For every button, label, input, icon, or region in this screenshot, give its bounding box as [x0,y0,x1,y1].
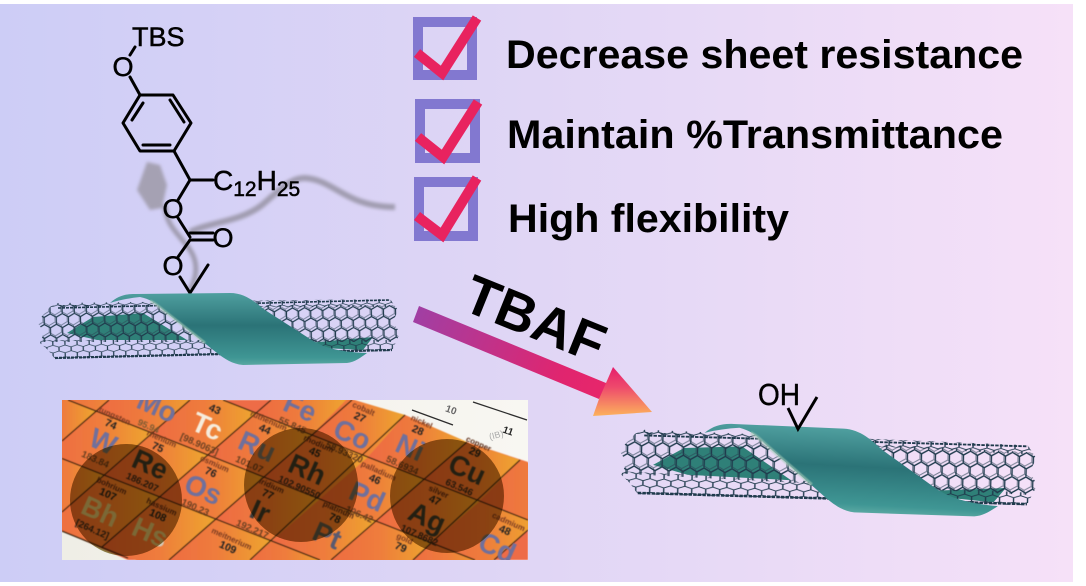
element symbols and numbers: silver [427,484,450,500]
element symbols and numbers: [98.9063] [178,432,220,458]
element symbols and numbers: 78 [327,511,343,527]
element symbols and numbers: 106.42 [344,504,375,526]
group headers: (IB) [488,428,505,442]
element symbols and numbers: 190.23 [180,497,211,519]
checklist [417,18,1023,241]
element symbols and numbers: Tc [187,406,227,447]
element symbols and numbers: 186.207 [124,471,160,495]
element symbols and numbers: 107.8682 [399,523,439,549]
element symbols and numbers: palladium [360,459,397,483]
element symbols and numbers: [264.12] [74,518,110,542]
atom labels: O [162,194,184,224]
element symbols and numbers: rhenium [145,428,178,449]
element symbols and numbers: 79 [393,540,409,556]
group headers: 11 [501,425,515,439]
element symbols and numbers: Ir [245,494,275,530]
element symbols and numbers: Fe [279,387,321,428]
element symbols and numbers: 95.94 [136,417,161,435]
element symbols and numbers: 108 [147,507,168,525]
element symbols and numbers: Re [128,443,173,486]
element symbols and numbers: Co [329,413,376,456]
element symbols and numbers: iridium [258,476,286,495]
chemical structure: TBS-protected aryl carbonate [112,22,300,293]
element symbols and numbers: 192.217 [234,518,270,542]
element symbols and numbers: 55.845 [277,415,308,437]
deposited circle: right [390,439,504,553]
element symbols and numbers: Pd [345,475,390,518]
element symbols and numbers: 29 [467,445,483,461]
element symbols and numbers: Pt [308,516,346,555]
text: decrease sheet resistance: Decrease sheet resistance [506,33,1023,77]
element symbols and numbers: 43 [207,402,223,418]
element symbols and numbers: 77 [260,487,276,503]
nanotube wrapped with polymer ribbon (left) [30,293,410,365]
atom labels: 25 [277,178,300,201]
element symbols and numbers: Hs [128,511,173,554]
element symbols and numbers: Ni [391,428,429,467]
element symbols and numbers: Cd [474,526,521,569]
element symbols and numbers: platinum [322,499,356,521]
element symbols and numbers: rhodium [302,433,335,455]
atom labels: 12 [233,178,257,201]
atom labels: O [162,251,184,281]
atom labels: H [257,165,277,196]
element symbols and numbers: 58.6934 [384,454,421,478]
reaction arrow [413,306,652,416]
coloured cells [62,400,528,560]
element symbols and numbers: bohrium [95,475,128,497]
nanotube with ribbon after deprotection (right) [608,416,1051,523]
hydroxyl label and bond [758,377,817,429]
element symbols and numbers: Os [180,468,227,511]
element symbols and numbers: gold [395,531,414,547]
element symbols and numbers: 48 [497,523,513,539]
element symbols and numbers: Ru [234,425,281,468]
element symbols and numbers: Bh [77,490,124,533]
atom labels: O [112,52,134,82]
element symbols and numbers: 109 [217,539,238,557]
atom labels: TBS [132,22,185,52]
checkbox: high flexibility [417,178,477,236]
checkbox: maintain transmittance [418,102,478,158]
element symbols and numbers: Rh [284,448,331,491]
element symbols and numbers [74,400,525,560]
element symbols and numbers: cobalt [351,400,376,418]
element symbols and numbers: 28 [410,423,426,439]
element symbols and numbers: 183.84 [80,449,111,471]
text: high flexibility: High flexibility [508,197,789,241]
element symbols and numbers: 75 [150,440,166,456]
element symbols and numbers: Ag [404,496,451,539]
element symbols and numbers: Mo [132,384,182,429]
element symbols and numbers: Cu [444,448,491,491]
element symbols and numbers: 47 [427,493,443,509]
deposited circle: middle [244,428,358,542]
element symbols and numbers: osmium [199,454,230,474]
hydroxyl label and bond: OH [758,377,800,412]
atom labels [112,22,300,281]
shadow of molecule on the sheet [137,162,395,290]
element symbols and numbers: 76 [203,465,219,481]
element symbols and numbers: 63.546 [444,477,475,499]
element symbols and numbers: meitnerium [210,526,253,552]
element symbols and numbers: 58.93320 [324,440,364,466]
element symbols and numbers: copper [465,434,493,453]
bonds [123,47,213,293]
element symbols and numbers: 102.90550 [276,474,322,502]
element symbols and numbers: 27 [352,410,368,426]
periodic table photo with metal-film circles [62,400,528,560]
group headers [412,402,527,442]
deposited circle: left [70,444,182,556]
element symbols and numbers: nickel [409,413,434,431]
element symbols and numbers: 46 [367,472,383,488]
element symbols and numbers: 74 [103,417,119,433]
element symbols and numbers: 101.07 [234,454,265,476]
element symbols and numbers: 45 [307,445,323,461]
element symbols and numbers: 107 [97,486,118,504]
reagent label: TBAF: TBAF [456,263,615,375]
element symbols and numbers: tungsten [97,405,132,427]
atom labels: O [212,223,234,253]
element symbols and numbers: 44 [257,422,273,438]
group headers: 10 [444,404,458,418]
element symbols and numbers: hassium [145,496,178,518]
checkbox: decrease sheet resistance [417,18,477,75]
element symbols and numbers: ruthenium [249,409,288,433]
element symbols and numbers: cadmium [491,511,526,533]
text: maintain transmittance: Maintain %Transmittance [507,113,1003,157]
atom labels: C [213,165,233,196]
element symbols and numbers: W [85,422,122,461]
